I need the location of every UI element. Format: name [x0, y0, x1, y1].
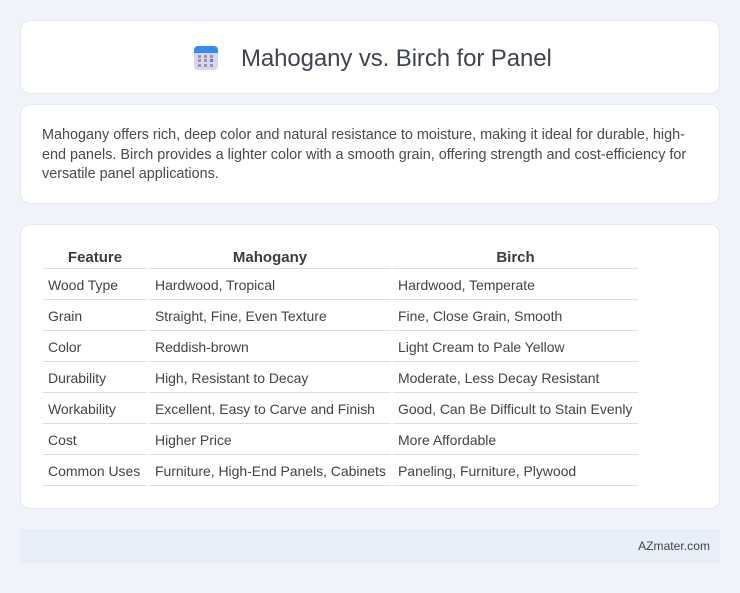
row: Common Uses: Paneling, Furniture, Plywood — [398, 463, 576, 479]
intro paragraph — [42, 127, 686, 182]
table header: Birch — [496, 249, 535, 266]
row: Workability: Good, Can Be Difficult to Stain Evenly — [398, 401, 632, 417]
row: Grain: Straight, Fine, Even Texture — [155, 308, 327, 324]
title: Mahogany vs. Birch for Panel — [241, 45, 552, 72]
row: Durability — [43, 370, 638, 393]
intro paragraph: versatile panel applications. — [42, 166, 219, 182]
row: Durability: Moderate, Less Decay Resistant — [398, 370, 599, 386]
panel: title card — [20, 20, 720, 94]
table header — [43, 249, 638, 269]
row: Wood Type: Hardwood, Tropical — [155, 277, 275, 293]
panel: comparison table — [20, 224, 720, 509]
intro paragraph: Mahogany offers rich, deep color and natural resistance to moisture, making it ideal for durable, high- — [42, 127, 685, 143]
row: Common Uses: Furniture, High-End Panels, Cabinets — [155, 463, 386, 479]
row: Grain: Grain — [48, 308, 82, 324]
row: Workability: Excellent, Easy to Carve and Finish — [155, 401, 375, 417]
row: Grain — [43, 308, 638, 331]
row: Wood Type: Hardwood, Temperate — [398, 277, 535, 293]
row: Workability — [43, 401, 638, 424]
row: Common Uses — [43, 463, 638, 486]
table header: Mahogany — [233, 249, 307, 266]
row: Color: Reddish-brown — [155, 339, 249, 355]
intro paragraph: end panels. Birch provides a lighter color with a smooth grain, offering strength and cost-efficiency for — [42, 146, 686, 162]
row: Cost — [43, 432, 638, 455]
row: Durability: High, Resistant to Decay — [155, 370, 308, 386]
icon: calendar — [194, 46, 218, 70]
row: Color: Light Cream to Pale Yellow — [398, 339, 565, 355]
row: Common Uses: Common Uses — [48, 463, 140, 479]
footer source text: AZmater.com — [638, 539, 710, 553]
row: Wood Type — [43, 277, 638, 300]
row: Grain: Fine, Close Grain, Smooth — [398, 308, 562, 324]
row: Cost: Cost — [48, 432, 77, 448]
row: Cost: Higher Price — [155, 432, 232, 448]
row: Cost: More Affordable — [398, 432, 496, 448]
table header: Feature — [68, 249, 122, 266]
row: Color — [43, 339, 638, 362]
row: Workability: Workability — [48, 401, 116, 417]
row: Wood Type: Wood Type — [48, 277, 118, 293]
row: Durability: Durability — [48, 370, 106, 386]
row: Color: Color — [48, 339, 81, 355]
footer bar — [20, 529, 720, 563]
panel: intro text — [20, 104, 720, 204]
